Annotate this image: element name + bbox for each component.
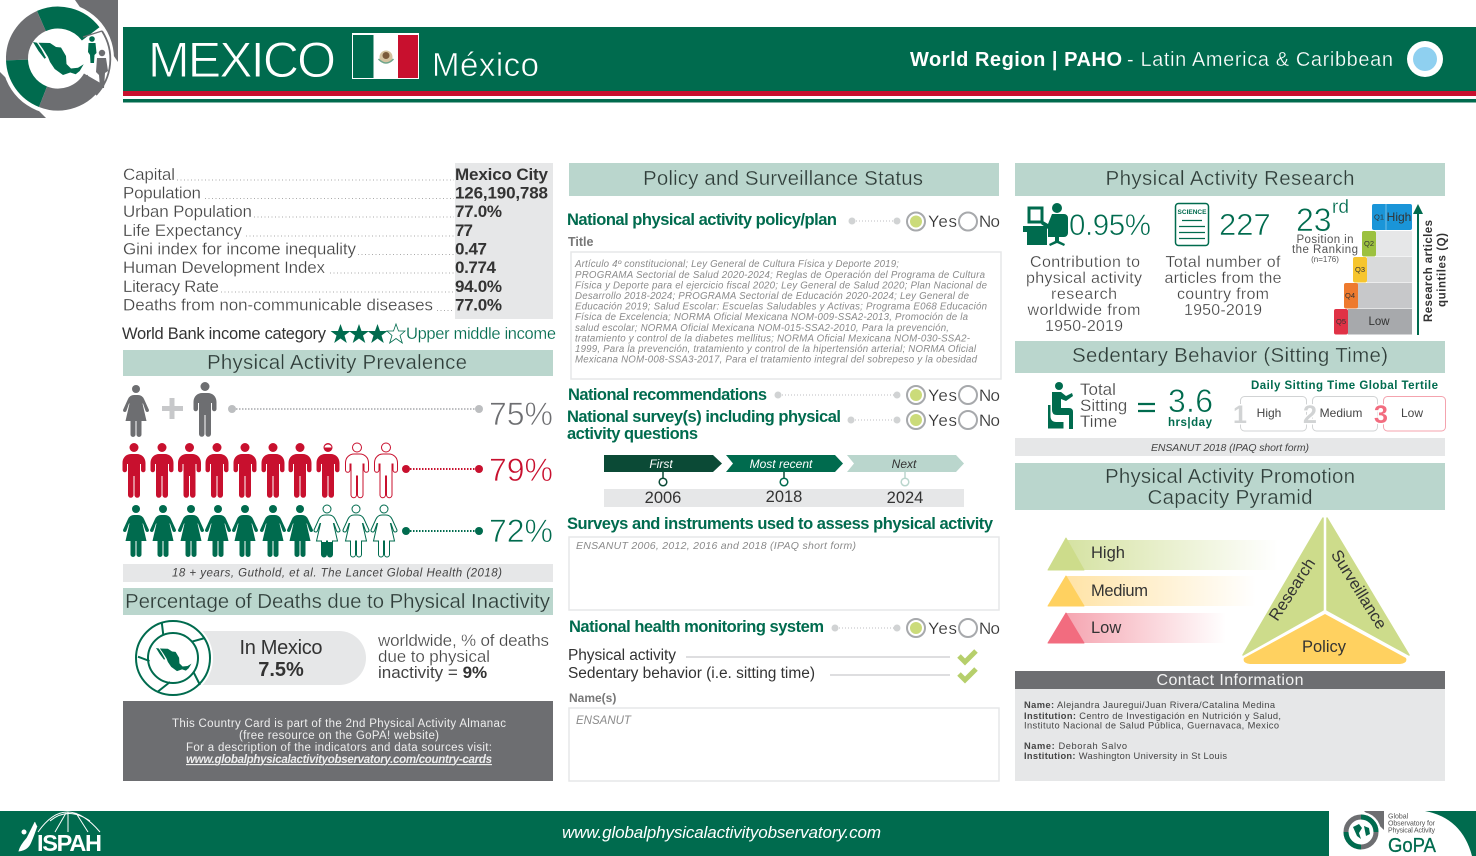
flag of Mexico [352, 34, 418, 78]
prevalence source note: 18 + years, Guthold, et al. The Lancet Global Health (2018) [172, 568, 502, 580]
chart: women prevalence 72%: 72% [489, 513, 553, 549]
policy title text box: Física y Deporte para el ejercicio fiscal 2020; Ley General de Salud 2020; Plan Nacional de [575, 280, 988, 292]
panel: deaths due to inactivity: In Mexico [240, 637, 322, 659]
national recommendations [568, 386, 1000, 405]
survey timeline: 2006 [645, 489, 681, 507]
panel: country facts: Life Expectancy [123, 221, 242, 240]
panel: deaths due to inactivity: inactivity = 9% [378, 663, 487, 682]
research contribution: Contribution to [1030, 254, 1140, 271]
World Bank income category [122, 324, 556, 343]
chart: overall prevalence 75% [123, 382, 553, 437]
research ranking: 23 [1296, 202, 1332, 238]
sitting time source note: ENSANUT 2018 (IPAQ short form) [1151, 442, 1309, 454]
research article count: country from [1177, 286, 1269, 303]
panel: country facts: 0.47 [455, 240, 487, 258]
heading: capacity pyramid: Physical Activity Promotion [1105, 465, 1355, 488]
world region: World Region | PAHO [910, 49, 1122, 71]
icon: person at computer [1023, 203, 1068, 246]
panel: country facts: Literacy Rate [123, 277, 219, 296]
panel: country facts: 0.774 [455, 258, 497, 277]
survey timeline: Most recent [750, 457, 813, 471]
national physical activity policy [567, 211, 1000, 231]
header band: - Latin America & Caribbean [1127, 49, 1393, 71]
daily sitting time tertile: Medium [1320, 406, 1362, 420]
monitored behaviours [568, 647, 976, 682]
website address: www.globalphysicalactivityobservatory.com [562, 823, 881, 842]
panel: country facts: Human Development Index [123, 258, 326, 277]
policy title text box: Title [568, 235, 594, 249]
panel: country facts: 77.0% [455, 296, 502, 314]
country name: MEXICO [148, 32, 336, 88]
chart: research quintile staircase [1334, 204, 1448, 335]
national physical activity policy: No [979, 212, 1000, 231]
national health monitoring system [569, 618, 1000, 638]
panel: country facts: Capital [123, 165, 175, 184]
surveys and instruments: Surveys and instruments used to assess physical activity [567, 515, 994, 533]
pyramid legend: Medium [1091, 582, 1148, 600]
sitting time source note [1015, 438, 1445, 456]
national surveys: Yes [928, 411, 957, 430]
total sitting time: 3.6 [1168, 383, 1213, 419]
national recommendations: Yes [928, 386, 957, 405]
GoPA logo: Global [1388, 814, 1409, 821]
panel: country facts: 126,190,788 [455, 184, 548, 202]
research ranking: rd [1332, 197, 1349, 218]
panel: deaths due to inactivity: worldwide, % of deaths [377, 631, 549, 650]
chart: research quintile staircase: Q1 [1374, 212, 1384, 222]
panel: contact information: Institution: Washington University in St Louis [1024, 751, 1227, 761]
panel: about note: This Country Card is part of the 2nd Physical Activity Almanac [172, 718, 506, 730]
policy title text box: 1999, Para la prevención, tratamiento y control de la hipertensión arterial; NORMA Oficial [575, 344, 977, 355]
survey timeline: 2024 [887, 489, 923, 507]
panel: contact information [1015, 671, 1445, 781]
national surveys: National survey(s) including physical [567, 408, 841, 426]
heading: physical activity prevalence [123, 350, 553, 376]
daily sitting time tertile: Daily Sitting Time Global Tertile [1251, 380, 1438, 392]
total sitting time: Sitting [1080, 396, 1127, 415]
system names box [569, 691, 999, 781]
survey timeline: Next [892, 457, 917, 471]
heading: capacity pyramid [1015, 463, 1445, 510]
research contribution: worldwide from [1026, 302, 1140, 319]
research article count: 227 [1219, 207, 1271, 242]
chart: overall prevalence 75%: 75% [489, 396, 553, 432]
GoPA logo [1329, 811, 1472, 856]
ISPAH logo: ISPAH [37, 830, 102, 856]
chart: men prevalence 79% [122, 443, 553, 498]
policy title text box [568, 235, 1001, 379]
pyramid legend [1048, 538, 1278, 643]
heading: physical activity research: Physical Activity Research [1106, 167, 1354, 190]
chart: research quintile staircase: quintiles (Q) [1436, 233, 1448, 307]
national surveys [567, 408, 1000, 443]
capacity pyramid: Policy [1302, 638, 1347, 656]
panel: country facts: 94.0% [455, 277, 502, 296]
total sitting time [1048, 380, 1213, 431]
icon: Mexico in ring [133, 618, 213, 698]
national surveys: activity questions [567, 425, 698, 443]
research contribution: 1950-2019 [1045, 318, 1123, 335]
surveys and instruments [567, 515, 999, 610]
heading: physical activity research [1015, 163, 1445, 196]
research contribution: research [1051, 286, 1117, 303]
total sitting time: Time [1080, 412, 1117, 431]
daily sitting time tertile: 2 [1303, 401, 1317, 429]
panel: contact information: Name: Deborah Salvo [1024, 741, 1127, 751]
policy title text box: Mexicana NOM-008-SSA3-2017, Para el tratamiento integral del sobrepeso y la obesidad [575, 354, 978, 366]
GoPA logo: Physical Activity [1388, 828, 1436, 835]
chart: research quintile staircase: Low [1368, 316, 1390, 328]
surveys and instruments: ENSANUT 2006, 2012, 2016 and 2018 (IPAQ short form) [576, 540, 856, 552]
policy title text box: Física de Excelencia; NORMA Oficial Mexicana NOM-009-SSA2-2013, Promoción de la [575, 312, 969, 323]
national health monitoring system: National health monitoring system [569, 618, 824, 636]
heading: deaths due to inactivity: Percentage of Deaths due to Physical Inactivity [125, 590, 551, 613]
panel: deaths due to inactivity: due to physical [378, 647, 490, 666]
pyramid legend: Low [1091, 619, 1121, 637]
heading: policy and surveillance status: Policy and Surveillance Status [643, 167, 923, 190]
chart: research quintile staircase: High [1387, 210, 1411, 224]
panel: contact information: Instituto Nacional de Salud Pública, Guernavaca, Mexico [1024, 720, 1279, 730]
total sitting time: hrs|day [1168, 417, 1213, 429]
monitored behaviours: Physical activity [568, 647, 676, 664]
panel: contact information: Name: Alejandra Jauregui/Juan Rivera/Catalina Medina [1024, 700, 1276, 710]
panel: about note: (free resource on the GoPA! website) [239, 730, 439, 742]
heading: capacity pyramid: Capacity Pyramid [1148, 486, 1312, 509]
research article count: Total number of [1166, 254, 1281, 271]
heading: sedentary behavior: Sedentary Behavior (Sitting Time) [1072, 344, 1388, 367]
heading: sedentary behavior [1015, 341, 1445, 373]
daily sitting time tertile: Low [1401, 406, 1423, 420]
daily sitting time tertile: 1 [1233, 401, 1247, 429]
daily sitting time tertile [1233, 380, 1446, 431]
GoPA logo: Observatory for [1388, 820, 1436, 828]
icon: seated person [1048, 382, 1073, 429]
country logo [0, 0, 118, 118]
research ranking: the Ranking [1292, 244, 1358, 256]
panel: contact information: Contact Information [1156, 672, 1304, 689]
prevalence source note [123, 564, 553, 582]
capacity pyramid [1243, 518, 1409, 664]
chart: men prevalence 79%: 79% [489, 452, 553, 488]
research ranking: Position in [1296, 234, 1354, 246]
chart: research quintile staircase: Q4 [1345, 291, 1355, 300]
policy title text box: PROGRAMA Sectorial de Salud 2020-2024; Reglas de Operación del Programa de Cultura [575, 270, 986, 281]
chart: research quintile staircase: Q3 [1355, 265, 1365, 274]
panel: country facts [123, 163, 553, 319]
local country name: México [432, 46, 539, 83]
research contribution: physical activity [1026, 270, 1142, 287]
survey timeline: First [649, 457, 673, 471]
panel: about note [123, 701, 553, 781]
heading: policy and surveillance status [569, 163, 999, 196]
panel: about note: For a description of the indicators and data sources visit: [186, 742, 492, 754]
header band [0, 0, 1476, 118]
daily sitting time tertile: High [1257, 406, 1281, 420]
panel: country facts: Gini index for income inequality [123, 240, 356, 258]
chart: research quintile staircase: Research articles [1423, 220, 1435, 322]
total sitting time: Total [1080, 380, 1116, 399]
survey timeline [604, 455, 964, 507]
national physical activity policy: Yes [928, 212, 957, 231]
system names box: ENSANUT [576, 715, 632, 727]
footer band [0, 811, 1476, 856]
panel: country facts: Urban Population [123, 202, 252, 221]
national recommendations: National recommendations [568, 386, 767, 404]
survey timeline: 2018 [766, 488, 802, 506]
national physical activity policy: National physical activity policy/plan [567, 211, 837, 229]
pyramid legend: High [1091, 544, 1125, 562]
World Bank income category: World Bank income category [122, 325, 327, 343]
chart: research quintile staircase: Q5 [1336, 317, 1346, 326]
research contribution: 0.95% [1069, 209, 1151, 242]
policy title text box: Educación 2019; Salud Escolar: Escuelas Saludables y Activas; Programa E068 Educación [575, 302, 987, 312]
national health monitoring system: Yes [928, 619, 957, 638]
daily sitting time tertile: 3 [1374, 401, 1388, 429]
panel: country facts: 77 [455, 221, 473, 240]
panel: deaths due to inactivity [133, 618, 549, 698]
chart: women prevalence 72% [123, 505, 553, 557]
research ranking [1292, 197, 1358, 264]
capacity pyramid: Surveillance [1327, 547, 1390, 633]
capacity pyramid: Research [1266, 555, 1319, 624]
system names box: Name(s) [569, 691, 616, 705]
research article count [1164, 204, 1282, 319]
policy title text box: Desarrollo 2018-2024; PROGRAMA Sectorial de Educación 2020-2024; Ley General de [575, 291, 970, 302]
panel: about note: www.globalphysicalactivityobservatory.com/country-cards [186, 754, 492, 766]
heading: physical activity prevalence: Physical Activity Prevalence [207, 351, 467, 374]
panel: country facts: Population [123, 184, 201, 202]
region colour marker [1407, 41, 1443, 77]
panel: deaths due to inactivity: 7.5% [258, 659, 304, 681]
icon: science document: SCIENCE [1178, 209, 1207, 216]
panel: contact information: Institution: Centro de Investigación en Nutrición y Salud, [1024, 711, 1281, 721]
national recommendations: No [979, 386, 1000, 405]
policy title text box: salud escolar; NORMA Oficial Mexicana NOM-015-SSA2-2010, Para la prevención, [575, 323, 949, 334]
ISPAH logo [19, 812, 102, 856]
research contribution [1023, 203, 1151, 335]
panel: country facts: Mexico City [455, 165, 549, 184]
research article count: 1950-2019 [1184, 302, 1262, 319]
monitored behaviours: Sedentary behavior (i.e. sitting time) [568, 665, 815, 682]
panel: country facts: 77.0% [455, 202, 502, 221]
policy title text box: Artículo 4º constitucional; Ley General de Cultura Física y Deporte 2019; [574, 259, 899, 270]
national surveys: No [979, 411, 1000, 430]
World Bank income category: Upper middle income [406, 325, 556, 343]
policy title text box: tratamiento y control de la diabetes mellitus; NORMA Oficial Mexicana NOM-030-SSA2- [575, 334, 971, 344]
national health monitoring system: No [979, 619, 1000, 638]
chart: research quintile staircase: Q2 [1364, 239, 1374, 248]
research article count: articles from the [1164, 270, 1282, 287]
panel: country facts: Deaths from non-communicable diseases [123, 296, 433, 314]
research ranking: (n=176) [1311, 255, 1339, 264]
